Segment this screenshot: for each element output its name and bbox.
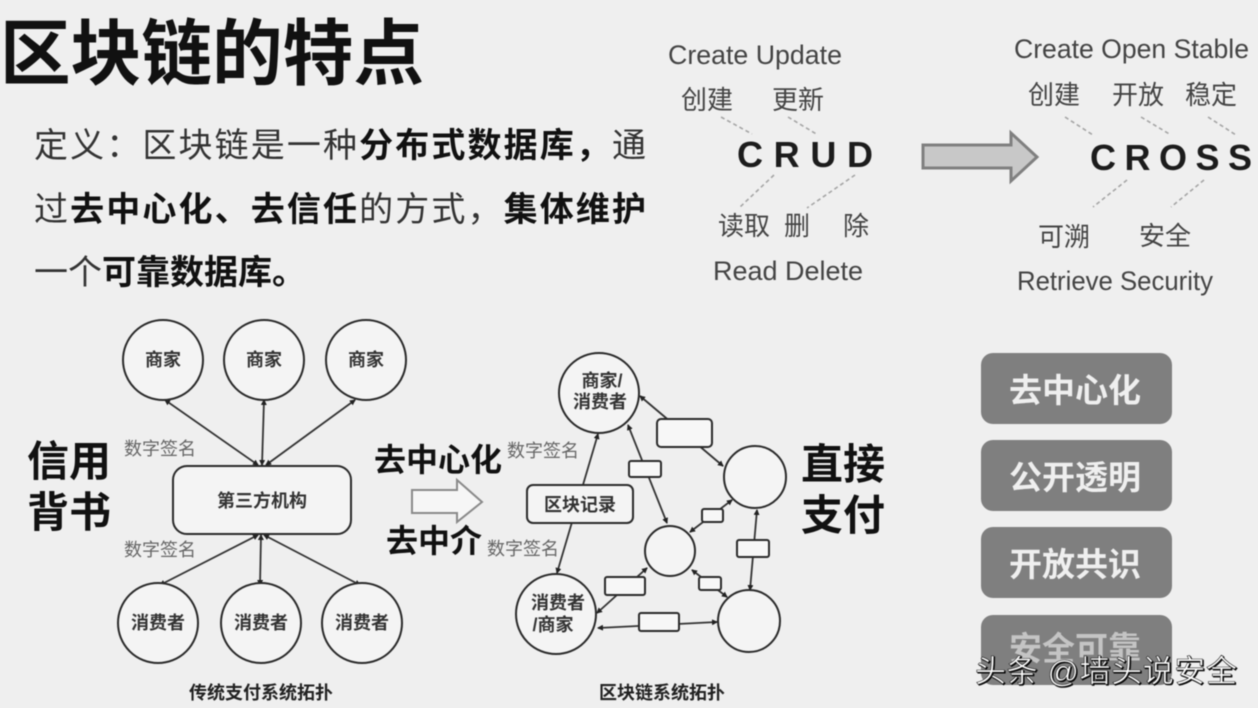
consumer node 1 — [118, 583, 198, 663]
CROSS diagram: 开放 — [1112, 80, 1164, 110]
third-party institution: 第三方机构 — [217, 490, 307, 511]
CRUD diagram: 删 — [784, 211, 810, 241]
blockchain node: merchant/consumer: 消费者 — [573, 392, 627, 412]
merchant node 3 — [326, 320, 406, 400]
blockchain node: merchant/consumer: 商家/ — [581, 370, 623, 391]
CRUD diagram: CRUD — [737, 134, 873, 175]
blockchain topology: 数字签名 — [507, 441, 579, 461]
CRUD diagram: 创建 — [681, 85, 733, 115]
definition text block: 一个可靠数据库。 — [34, 254, 306, 292]
decentralization arrow group: 去中心化 — [374, 442, 502, 478]
button: transparent: 公开透明 — [1009, 459, 1141, 496]
CROSS diagram — [1014, 34, 1252, 296]
CRUD diagram: Read Delete — [713, 256, 863, 286]
consumer node 2: 消费者 — [234, 613, 288, 633]
blockchain topology — [487, 353, 786, 703]
label: direct payment: 直接 — [801, 441, 885, 488]
blockchain record box — [527, 485, 633, 523]
definition text block: 过去中心化、去信任的方式，集体维护 — [34, 191, 646, 229]
button: open consensus — [981, 527, 1172, 598]
consumer node 3: 消费者 — [335, 613, 389, 633]
button: transparent — [981, 440, 1172, 511]
button: secure and reliable: 安全可靠 — [1009, 630, 1141, 667]
consumer node 2 — [221, 583, 301, 663]
merchant node 1 — [123, 320, 203, 400]
CROSS diagram: 可溯 — [1038, 222, 1090, 252]
CRUD diagram: 读取 — [718, 211, 770, 241]
CROSS diagram: 创建 — [1028, 80, 1080, 110]
decentralization arrow group — [374, 442, 502, 559]
merchant node 2 — [224, 320, 304, 400]
blockchain node: consumer/merchant: /商家 — [532, 614, 574, 635]
button: decentralised — [981, 353, 1172, 424]
watermark: 头条 @墙头说安全 — [975, 654, 1237, 689]
blockchain node: empty bottom right — [718, 590, 780, 652]
merchant node 3: 商家 — [348, 349, 384, 370]
CROSS diagram: 稳定 — [1185, 80, 1237, 110]
definition text block — [34, 127, 646, 292]
CROSS diagram: CROSS — [1090, 137, 1252, 178]
blockchain topology: 数字签名 — [487, 539, 559, 559]
feature buttons — [981, 353, 1172, 685]
third-party institution — [173, 466, 351, 534]
label: direct payment — [801, 441, 885, 539]
blockchain node: empty centre — [645, 526, 695, 576]
small ledger blocks — [605, 419, 769, 631]
label: credit endorsement: 信用 — [27, 438, 111, 485]
label: credit endorsement: 背书 — [27, 489, 111, 536]
button: decentralised: 去中心化 — [1009, 372, 1141, 409]
button: open consensus: 开放共识 — [1009, 546, 1141, 583]
title: 区块链的特点 — [0, 15, 424, 95]
blockchain record box: 区块记录 — [544, 495, 616, 515]
decentralization arrow group: 去中介 — [386, 523, 482, 559]
blockchain node: consumer/merchant: 消费者 — [531, 593, 585, 613]
traditional payment topology: 传统支付系统拓扑 — [189, 682, 333, 703]
CROSS diagram: 安全 — [1139, 221, 1191, 251]
arrow: CRUD to CROSS — [923, 133, 1037, 181]
CRUD diagram — [668, 40, 873, 286]
blockchain node: empty top right — [724, 446, 786, 508]
button: secure and reliable — [981, 615, 1172, 685]
CROSS diagram: Create Open Stable — [1014, 34, 1249, 64]
traditional payment topology: 数字签名 — [124, 439, 196, 459]
blockchain topology: 区块链系统拓扑 — [599, 682, 725, 703]
CRUD diagram: 更新 — [772, 85, 824, 115]
definition text block: 定义：区块链是一种分布式数据库，通 — [34, 127, 646, 165]
CROSS diagram: Retrieve Security — [1017, 266, 1213, 296]
blockchain node: consumer/merchant — [516, 574, 596, 654]
blockchain node: merchant/consumer — [559, 353, 639, 433]
consumer node 1: 消费者 — [131, 613, 185, 633]
label: credit endorsement — [27, 438, 111, 536]
CRUD diagram: 除 — [843, 211, 869, 241]
traditional payment topology — [118, 320, 406, 703]
merchant node 2: 商家 — [246, 349, 282, 370]
merchant node 1: 商家 — [145, 349, 181, 370]
consumer node 3 — [322, 583, 402, 663]
traditional payment topology: 数字签名 — [124, 540, 196, 560]
label: direct payment: 支付 — [801, 492, 885, 539]
CRUD diagram: Create Update — [668, 40, 842, 70]
